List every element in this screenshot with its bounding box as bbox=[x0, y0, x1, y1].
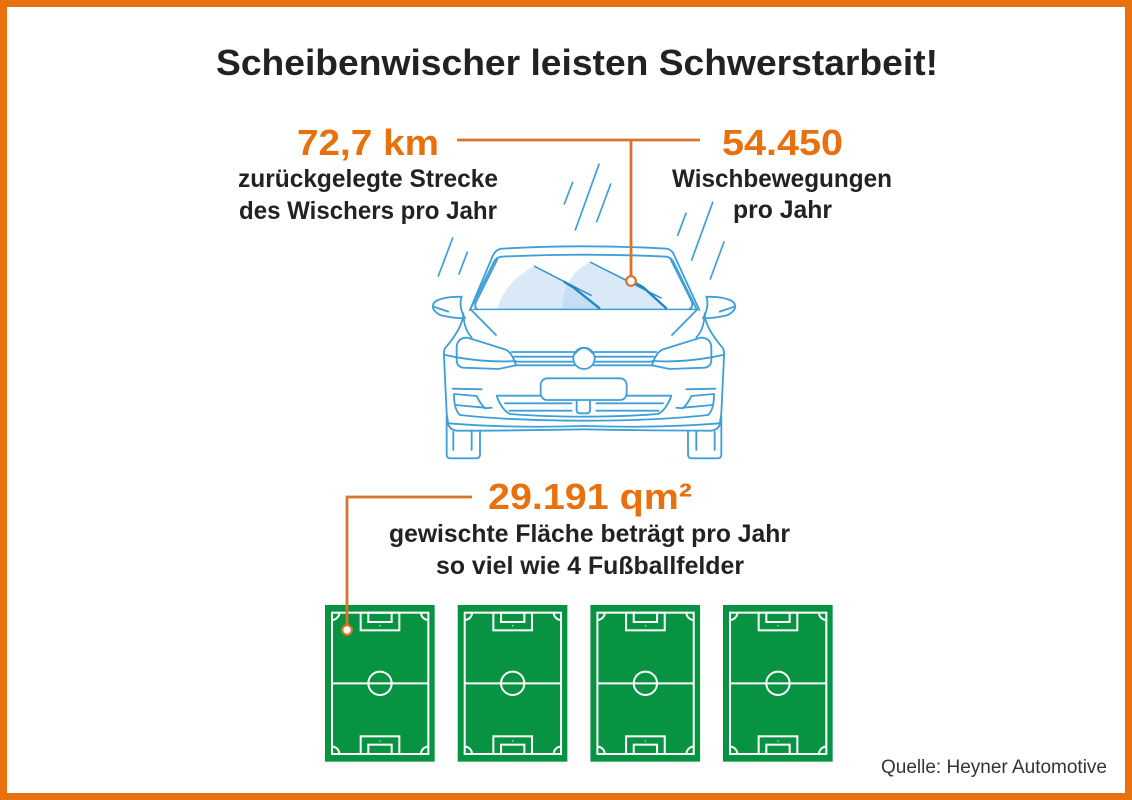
callout: 54.450: Wischbewegungen bbox=[672, 165, 892, 193]
icon: rain lines bbox=[438, 164, 724, 279]
field 1 bbox=[325, 605, 435, 762]
windshield frame and roof bbox=[433, 246, 735, 318]
wipers bbox=[534, 262, 662, 298]
callout: 29.191 qm²: gewischte Fläche beträgt pro Jahr bbox=[389, 520, 790, 548]
callout: 29.191 qm² bbox=[389, 476, 790, 580]
source note: Quelle: Heyner Automotive bbox=[881, 757, 1107, 778]
callout: 29.191 qm²: so viel wie 4 Fußballfelder bbox=[436, 552, 744, 580]
field 3 bbox=[590, 605, 700, 762]
connector: top callouts to wiper bbox=[457, 140, 700, 286]
callout: 54.450: 54.450 bbox=[722, 122, 843, 163]
field 4 bbox=[723, 605, 833, 762]
callout: 54.450 bbox=[672, 122, 892, 224]
icon: car front view bbox=[433, 246, 735, 458]
title: Scheibenwischer leisten Schwerstarbeit! bbox=[216, 42, 938, 83]
connector: area callout to field bbox=[342, 497, 472, 635]
car body bbox=[444, 309, 724, 458]
callout: 72,7 km: 72,7 km bbox=[297, 122, 439, 163]
callout: 72,7 km bbox=[238, 122, 498, 225]
callout: 29.191 qm²: 29.191 qm² bbox=[488, 476, 692, 517]
field 2 bbox=[458, 605, 567, 762]
football fields bbox=[325, 605, 833, 762]
callout: 72,7 km: des Wischers pro Jahr bbox=[239, 197, 497, 225]
callout: 72,7 km: zurückgelegte Strecke bbox=[238, 165, 498, 193]
callout: 54.450: pro Jahr bbox=[733, 196, 832, 224]
windshield wiped areas bbox=[433, 246, 735, 318]
